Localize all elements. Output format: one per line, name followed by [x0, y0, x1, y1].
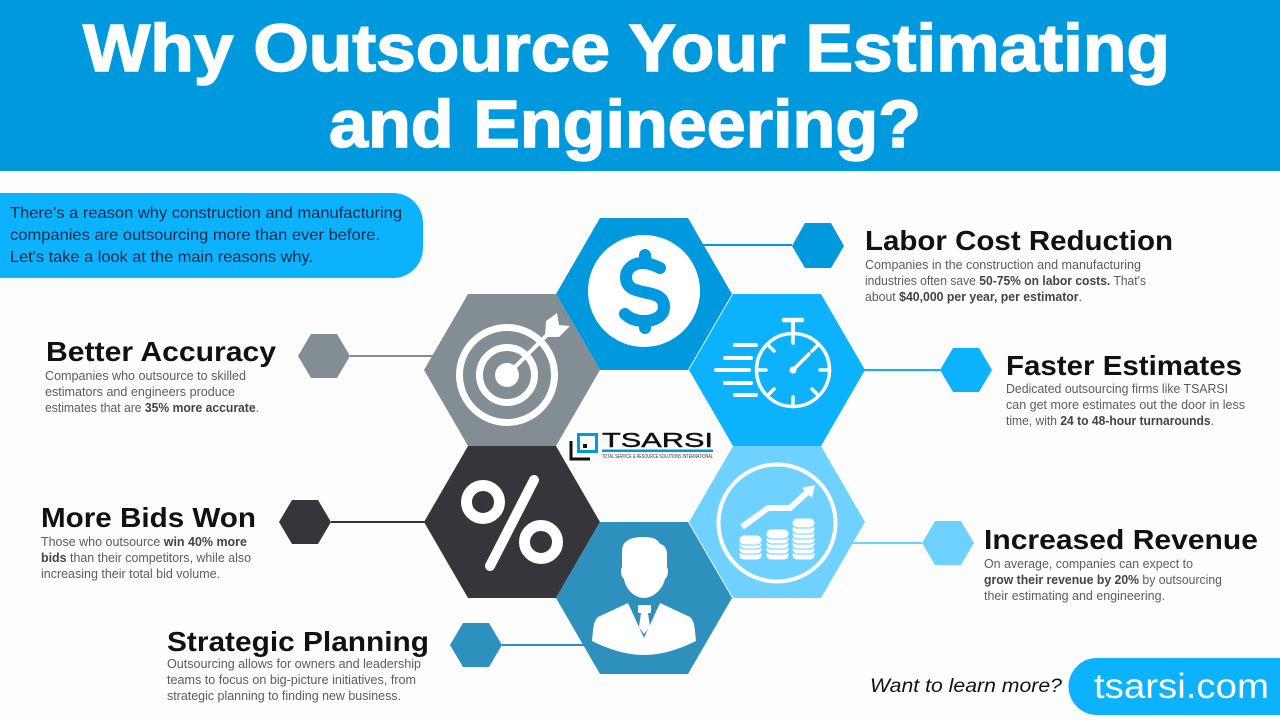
hexagon: dollar / labor cost	[556, 218, 732, 370]
small hexagon: increased revenue	[922, 521, 974, 565]
hexagon: percent / more bids won	[424, 446, 600, 598]
website pill: tsarsi.com	[1094, 667, 1269, 706]
block: faster estimates	[1006, 350, 1245, 428]
block: better accuracy: estimators and engineers produce	[45, 385, 235, 399]
title banner	[0, 0, 1280, 171]
block: labor cost reduction: about $40,000 per year, per estimator.	[865, 290, 1082, 304]
block: more bids won: Those who outsource win 40% more	[41, 535, 247, 549]
icon: revenue growth coins	[718, 464, 836, 582]
block: more bids won: bids than their competitors, while also	[41, 551, 251, 565]
block: increased revenue: their estimating and engineering.	[984, 589, 1165, 603]
logo: TSARSI	[571, 430, 713, 460]
intro callout: Let's take a look at the main reasons why.	[10, 249, 313, 266]
small hexagon: strategic planning	[450, 623, 502, 667]
icon: percent sign	[466, 480, 558, 566]
block: labor cost reduction: Labor Cost Reduction	[865, 225, 1173, 256]
block: better accuracy: Better Accuracy	[46, 336, 277, 367]
icon: target with arrow	[460, 313, 570, 422]
block: increased revenue: Increased Revenue	[984, 524, 1258, 555]
block: better accuracy: Companies who outsource to skilled	[45, 369, 246, 383]
hexagon: businessman / strategic planning	[556, 522, 732, 674]
hexagon: stopwatch / faster estimates	[689, 294, 865, 446]
block: labor cost reduction: Companies in the construction and manufacturing	[865, 258, 1141, 272]
title	[83, 11, 1170, 162]
hexagon: target / better accuracy	[424, 294, 600, 446]
title: Why Outsource Your Estimating	[83, 11, 1170, 86]
block: more bids won: More Bids Won	[41, 502, 256, 533]
intro callout: companies are outsourcing more than ever before.	[10, 227, 380, 244]
block: faster estimates: Faster Estimates	[1006, 350, 1242, 381]
intro callout: There's a reason why construction and manufacturing	[10, 205, 402, 222]
connector lines	[331, 245, 940, 645]
block: faster estimates: time, with 24 to 48-hour turnarounds.	[1006, 414, 1214, 428]
block: strategic planning	[167, 626, 429, 703]
block: strategic planning: strategic planning to finding new business.	[167, 689, 401, 703]
block: increased revenue	[984, 524, 1258, 603]
block: more bids won: increasing their total bid volume.	[41, 567, 220, 581]
hexagon: revenue / increased revenue	[689, 446, 865, 598]
block: strategic planning: Strategic Planning	[167, 626, 429, 657]
icon: dollar coin	[588, 235, 700, 347]
block: better accuracy: estimates that are 35% more accurate.	[45, 401, 259, 415]
small hexagon: faster estimates	[940, 348, 992, 392]
logo: TSARSI: TOTAL SERVICE & RESOURCE SOLUTIONS INTERNATIONAL	[602, 454, 713, 460]
small hexagon: better accuracy	[298, 334, 350, 378]
small hexagon: labor cost	[792, 223, 844, 268]
title: and Engineering?	[329, 87, 921, 162]
block: faster estimates: can get more estimates out the door in less	[1006, 398, 1245, 412]
block: increased revenue: grow their revenue by 20% by outsourcing	[984, 573, 1222, 587]
block: labor cost reduction: industries often save 50-75% on labor costs. That's	[865, 274, 1146, 288]
block: increased revenue: On average, companies can expect to	[984, 557, 1193, 571]
logo: TSARSI: TSARSI	[602, 430, 713, 452]
intro callout	[0, 193, 423, 278]
icon: businessman	[592, 537, 696, 655]
call to action text: Want to learn more?	[870, 676, 1062, 697]
block: strategic planning: teams to focus on big-picture initiatives, from	[167, 673, 416, 687]
block: labor cost reduction	[865, 225, 1173, 304]
block: faster estimates: Dedicated outsourcing firms like TSARSI	[1006, 382, 1228, 396]
block: better accuracy	[45, 336, 277, 415]
website pill	[1068, 658, 1280, 715]
icon: stopwatch	[716, 320, 830, 406]
block: more bids won	[41, 502, 256, 581]
block: strategic planning: Outsourcing allows for owners and leadership	[167, 657, 421, 671]
small hexagon: more bids won	[279, 500, 331, 544]
